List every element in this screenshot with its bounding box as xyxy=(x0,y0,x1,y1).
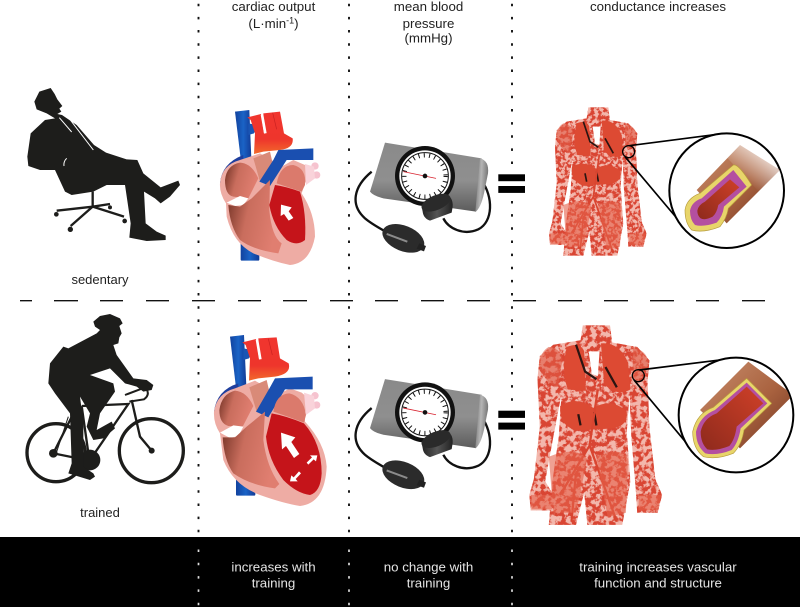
icon: cyclist xyxy=(27,314,183,483)
magnified artery inset, trained xyxy=(632,358,793,472)
footer text: cardiac output: training xyxy=(252,575,295,590)
vascular network, sedentary body xyxy=(549,107,647,256)
row divider xyxy=(20,300,765,302)
icon: blood pressure gauge, trained xyxy=(356,379,490,495)
footer text: blood pressure: no change with xyxy=(384,560,473,574)
column dividers xyxy=(198,4,512,537)
heading: cardiac output: ) xyxy=(294,16,299,31)
heading: cardiac output: -1 xyxy=(286,16,294,26)
vascular network, trained body xyxy=(529,325,662,525)
icon: blood pressure gauge, sedentary xyxy=(356,143,490,258)
footer text: vascular: training increases vascular xyxy=(579,560,737,574)
icon: sedentary man on office chair xyxy=(27,88,180,241)
footer dividers xyxy=(198,550,512,607)
heading: cardiac output: (L·min xyxy=(248,16,299,31)
footer text: cardiac output: increases with xyxy=(231,560,316,574)
heading: mean blood pressure: (mmHg) xyxy=(404,30,453,46)
icon: enlarged trained heart xyxy=(214,335,327,506)
footer text: blood pressure: training xyxy=(407,575,450,590)
label: trained: trained xyxy=(80,505,120,520)
equals sign, trained xyxy=(498,411,525,430)
footer text: vascular: function and structure xyxy=(594,575,722,590)
heading: mean blood pressure: pressure xyxy=(403,16,454,31)
label: sedentary: sedentary xyxy=(71,272,129,287)
equals sign, sedentary xyxy=(498,174,525,193)
magnified artery inset, sedentary xyxy=(623,133,784,248)
footer band xyxy=(0,537,800,607)
icon: heart at rest xyxy=(220,110,320,265)
